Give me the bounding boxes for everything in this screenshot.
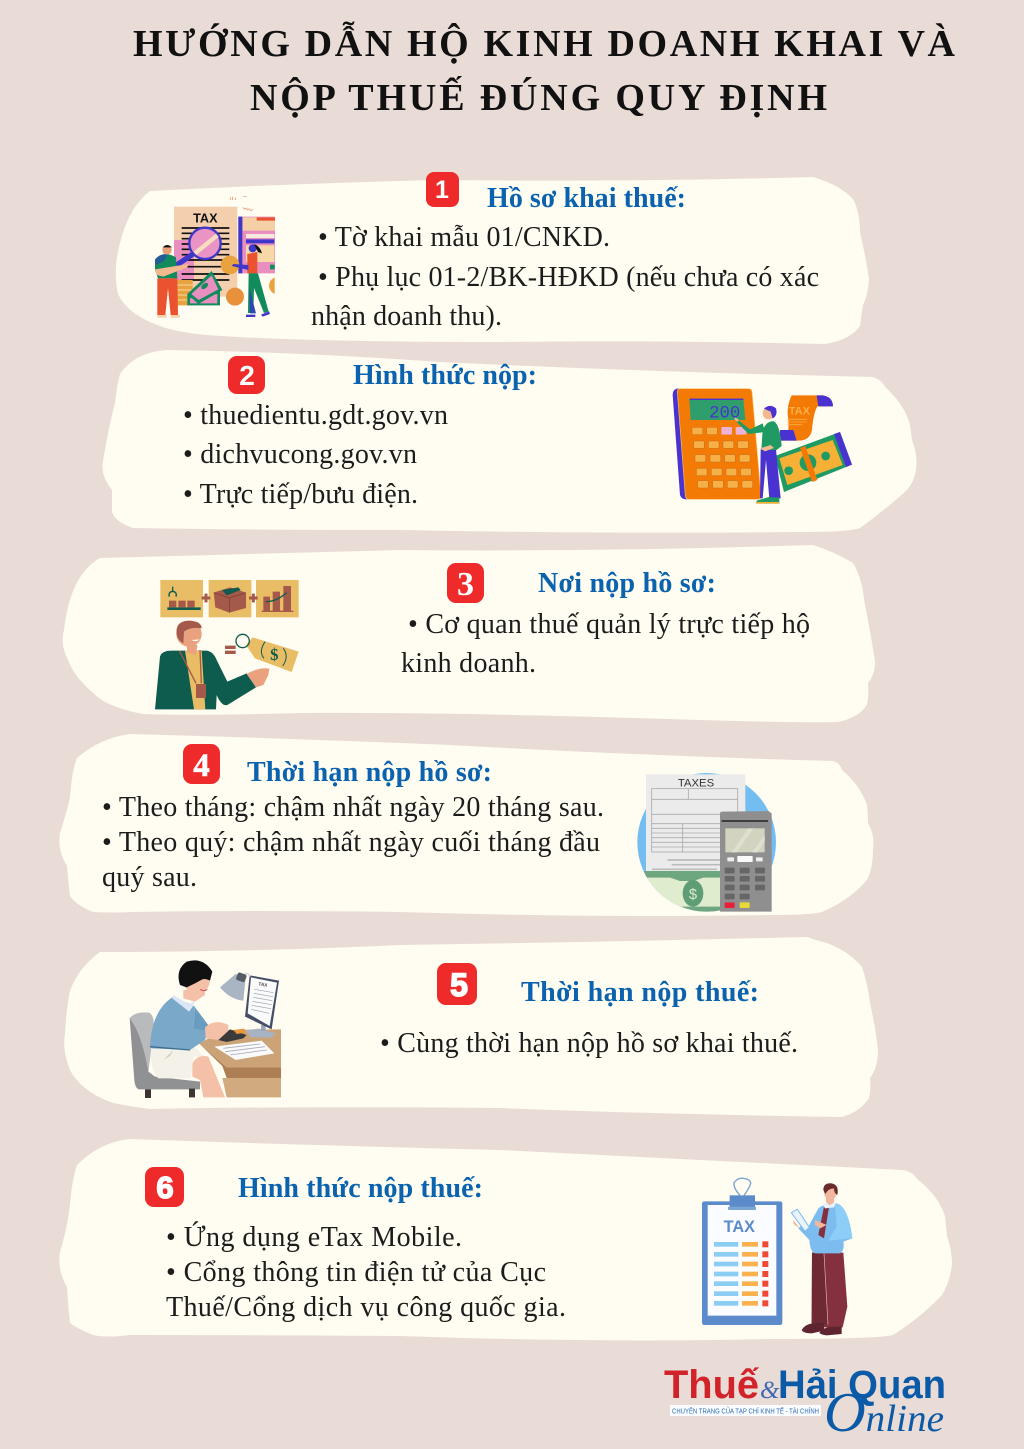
text block 1: • Phụ lục 01-2/BK-HĐKD (nếu chưa có xác	[318, 262, 819, 293]
panel: hồ sơ khai thuế	[116, 172, 869, 344]
logo: Thuế & Hải Quan Online: Thuế	[664, 1363, 760, 1407]
panel: thời hạn nộp hồ sơ	[59, 734, 873, 916]
text block 2: • Trực tiếp/bưu điện.	[183, 479, 418, 510]
icon: taxes form and card reader: TAXES	[678, 777, 715, 789]
text block 5: • Cùng thời hạn nộp hồ sơ khai thuế.	[380, 1028, 798, 1059]
icon: calculator and money: 200	[709, 404, 740, 423]
panel: thời hạn nộp thuế	[64, 937, 878, 1117]
icon: employee with price tag	[155, 580, 299, 709]
logo: Thuế & Hải Quan Online: Online	[824, 1382, 944, 1444]
panel 4 background	[59, 734, 873, 916]
icon: tax document with magnifier: TAX	[193, 212, 218, 226]
text block 4: quý sau.	[102, 862, 197, 893]
logo: Thuế & Hải Quan Online	[664, 1363, 946, 1444]
badge 3	[447, 563, 484, 603]
text block 2	[183, 400, 448, 510]
logo: Thuế & Hải Quan Online: CHUYÊN TRANG CỦA TẠP CHÍ KINH TẾ - TÀI CHÍNH	[672, 1406, 819, 1416]
heading 6: Hình thức nộp thuế:	[238, 1173, 483, 1204]
title: HƯỚNG DẪN HỘ KINH DOANH KHAI VÀ	[133, 21, 956, 65]
badge 1	[426, 172, 459, 207]
icon: calculator and money	[673, 389, 852, 504]
heading 1: Hồ sơ khai thuế:	[487, 183, 686, 214]
heading 2: Hình thức nộp:	[353, 360, 537, 391]
text block 1: nhận doanh thu).	[311, 301, 502, 332]
text block 2: • dichvucong.gov.vn	[183, 439, 417, 470]
badge 5: 5	[450, 967, 468, 1003]
icon: calculator and money: TAX	[789, 406, 811, 418]
badge 4	[183, 744, 220, 784]
panel 3 background	[63, 545, 875, 722]
text block 4: • Theo tháng: chậm nhất ngày 20 tháng sau.	[102, 792, 604, 823]
panel 1 background	[116, 177, 869, 344]
icon: taxes form and card reader	[633, 773, 776, 913]
text block 1: • Tờ khai mẫu 01/CNKD.	[318, 222, 610, 253]
logo: Thuế & Hải Quan Online: &	[760, 1377, 780, 1404]
badge 6	[145, 1167, 184, 1207]
badge 5	[437, 963, 477, 1005]
heading 3: Nơi nộp hồ sơ:	[538, 568, 716, 599]
panel 5 background	[64, 937, 878, 1117]
text block 3: kinh doanh.	[401, 648, 536, 679]
text block 6	[166, 1222, 566, 1323]
panel: hình thức nộp thuế	[59, 1139, 952, 1340]
text block 1	[311, 222, 819, 332]
badge 4: 4	[193, 748, 210, 784]
text block 3: • Cơ quan thuế quản lý trực tiếp hộ	[408, 609, 810, 640]
text block 6: Thuế/Cổng dịch vụ công quốc gia.	[166, 1292, 566, 1323]
icon: tax checklist and businessman	[702, 1178, 852, 1335]
icon: tax checklist and businessman: TAX	[724, 1217, 755, 1236]
panel 2 background	[102, 350, 916, 533]
icon: tax document with magnifier	[155, 197, 275, 318]
text block 4	[102, 792, 604, 893]
badge 3: 3	[457, 566, 474, 603]
text block 3	[401, 609, 810, 679]
badge 6: 6	[156, 1170, 174, 1205]
text block 2: • thuedientu.gdt.gov.vn	[183, 400, 448, 431]
icon: person working at desk: TAX	[258, 981, 269, 988]
text block 4: • Theo quý: chậm nhất ngày cuối tháng đầu	[102, 827, 600, 858]
heading 4: Thời hạn nộp hồ sơ:	[247, 757, 492, 788]
badge 2	[228, 356, 265, 394]
panel: hình thức nộp	[102, 350, 916, 533]
panel: nơi nộp hồ sơ	[63, 545, 875, 722]
title	[133, 21, 956, 119]
badge 1: 1	[435, 176, 449, 204]
icon: person working at desk	[130, 960, 281, 1098]
text block 6: • Ứng dụng eTax Mobile.	[166, 1222, 462, 1253]
icon: employee with price tag: $	[270, 645, 278, 664]
panel 6 background	[59, 1139, 952, 1340]
icon: taxes form and card reader: $	[689, 887, 697, 903]
badge 2: 2	[239, 360, 255, 391]
title: NỘP THUẾ ĐÚNG QUY ĐỊNH	[250, 76, 827, 119]
logo: Thuế & Hải Quan Online: Hải Quan	[778, 1363, 946, 1407]
heading 5: Thời hạn nộp thuế:	[521, 977, 759, 1008]
text block 6: • Cổng thông tin điện tử của Cục	[166, 1257, 546, 1288]
